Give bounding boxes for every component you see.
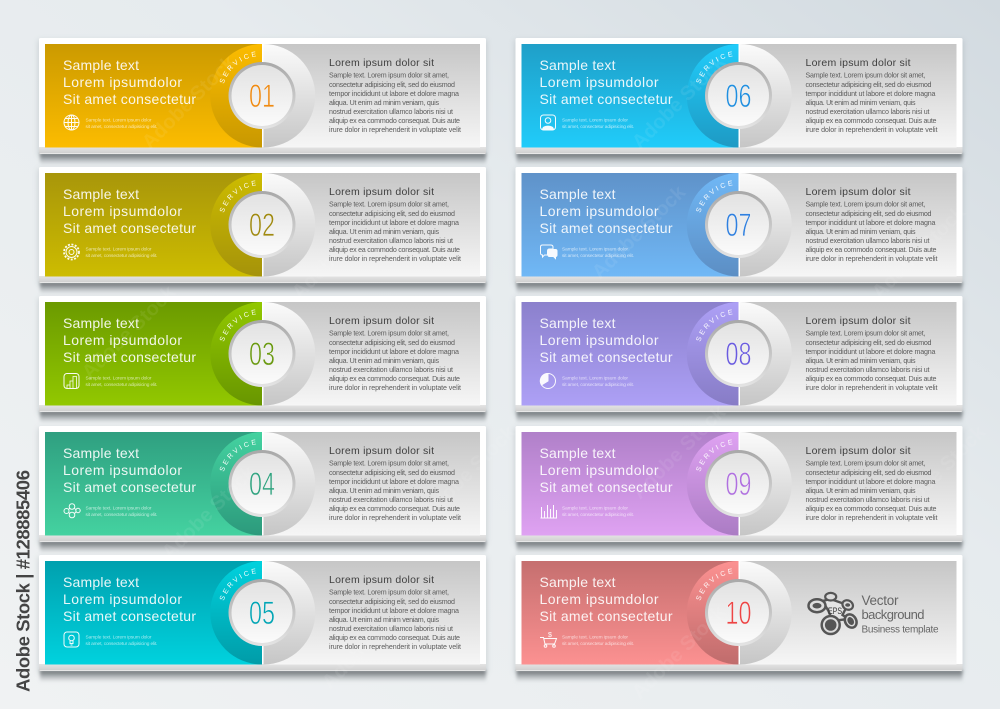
description block: Lorem ipsum dolor sit (806, 445, 911, 457)
description block: Sample text. Lorem ipsum dolor sit amet, (806, 460, 926, 468)
heading lines: Sample text (540, 186, 616, 202)
heading lines: Sample text (540, 574, 616, 590)
service label: SERVICE (220, 52, 256, 84)
card frame (38, 555, 487, 682)
description block: consectetur adipisicing elit, sed do eiusmod (329, 210, 455, 218)
description block (806, 57, 938, 134)
small caption: sit amet, consectetur adipisicing elit. (86, 253, 158, 259)
heading lines (540, 186, 673, 236)
grey panel (264, 432, 480, 536)
grey panel (264, 44, 480, 148)
description block: tempor incididunt ut labore et dolore magna (806, 90, 936, 98)
faint watermark: Adobe Stock (628, 601, 731, 704)
description block: Lorem ipsum dolor sit (329, 186, 434, 198)
description block (806, 186, 938, 263)
faint watermark: Adobe Stock (418, 421, 521, 524)
small caption: sit amet, consectetur adipisicing elit. (86, 382, 158, 388)
small caption: sit amet, consectetur adipisicing elit. (562, 382, 634, 388)
heading lines (540, 57, 673, 107)
heading lines: Lorem ipsumdolor (63, 74, 182, 90)
service label: SERVICE (696, 52, 733, 84)
small caption: sit amet, consectetur adipisicing elit. (562, 641, 634, 647)
description block: consectetur adipisicing elit, sed do eiusmod (806, 81, 932, 89)
description block: Sample text. Lorem ipsum dolor sit amet, (329, 72, 449, 80)
description block: aliquip ex ea commodo consequat. Duis aute (806, 117, 937, 125)
icon: light bulb tile (64, 632, 79, 647)
description block: aliquip ex ea commodo consequat. Duis aute (806, 246, 937, 254)
small caption (562, 118, 634, 130)
service label: SERVICE (696, 180, 732, 212)
icon: shopping cart with dollar (540, 632, 556, 647)
heading lines: Sit amet consectetur (63, 349, 196, 365)
card frame (514, 167, 964, 294)
small caption: Sample text. Lorem ipsum dolor (562, 246, 628, 252)
number ring (687, 302, 792, 406)
description block: Sample text. Lorem ipsum dolor sit amet, (329, 588, 449, 596)
faint watermark: Adobe Stock (888, 421, 991, 524)
card frame (514, 426, 964, 553)
card frame (514, 555, 964, 682)
small caption: Sample text. Lorem ipsum dolor (86, 506, 152, 512)
icon: column chart (540, 505, 557, 518)
card 06 (513, 38, 966, 164)
heading lines: Sit amet consectetur (540, 479, 673, 495)
small caption: Sample text. Lorem ipsum dolor (86, 376, 152, 382)
description block: irure dolor in reprehenderit in voluptate velit (329, 643, 461, 651)
colored panel (522, 44, 738, 148)
description block: Lorem ipsum dolor sit (806, 186, 911, 198)
grey panel (740, 44, 956, 148)
icon: molecule (64, 504, 80, 518)
grey panel (740, 561, 956, 664)
number: 06 (726, 78, 752, 114)
number ring (210, 44, 315, 148)
small caption: Sample text. Lorem ipsum dolor (562, 634, 628, 640)
heading lines: Sit amet consectetur (63, 220, 196, 236)
icon: bar chart tile (64, 374, 79, 388)
service label: SERVICE (696, 568, 732, 600)
EPS logo: EPS (828, 606, 842, 616)
heading lines: Sample text (63, 186, 139, 202)
heading lines: Lorem ipsumdolor (63, 591, 182, 607)
icon: shopping cart with dollar: $ (548, 632, 552, 639)
colored panel (522, 561, 738, 664)
faint watermark: Adobe Stock (318, 591, 421, 694)
heading lines: Lorem ipsumdolor (63, 462, 182, 478)
heading lines: Lorem ipsumdolor (63, 332, 182, 348)
description block (806, 315, 938, 392)
description block (329, 57, 461, 134)
description block: consectetur adipisicing elit, sed do eiusmod (806, 469, 932, 477)
description block: irure dolor in reprehenderit in voluptate velit (806, 126, 938, 134)
small caption: sit amet, consectetur adipisicing elit. (86, 512, 158, 518)
colored panel (45, 44, 262, 148)
card 05 (36, 555, 489, 682)
description block: irure dolor in reprehenderit in voluptate velit (806, 255, 938, 263)
small caption (562, 634, 634, 647)
description block: aliqua. Ut enim ad minim veniam, quis (329, 616, 439, 624)
stock watermark id: Adobe Stock | #128885406 (12, 470, 34, 692)
description block: aliquip ex ea commodo consequat. Duis aute (329, 375, 460, 383)
small caption: sit amet, consectetur adipisicing elit. (562, 253, 634, 259)
card 09 (513, 426, 966, 552)
heading lines (63, 445, 196, 495)
faint watermark: Adobe Stock (588, 181, 691, 284)
description block: tempor incididunt ut labore et dolore magna (329, 607, 459, 615)
faint watermark: Adobe Stock (138, 51, 241, 154)
description block: consectetur adipisicing elit, sed do eiusmod (329, 81, 455, 89)
description block: Lorem ipsum dolor sit (806, 57, 911, 69)
number: 10 (726, 595, 752, 631)
heading lines: Lorem ipsumdolor (540, 203, 659, 219)
service label: SERVICE (220, 310, 256, 342)
faint watermark: Adobe (858, 74, 918, 134)
template caption (862, 593, 939, 636)
description block: Sample text. Lorem ipsum dolor sit amet, (806, 330, 926, 338)
small caption: sit amet, consectetur adipisicing elit. (86, 124, 158, 130)
description block: tempor incididunt ut labore et dolore magna (329, 219, 459, 227)
number ring (210, 173, 315, 276)
heading lines: Lorem ipsumdolor (540, 74, 659, 90)
icon: chat bubbles (540, 245, 557, 258)
description block: Lorem ipsum dolor sit (329, 315, 434, 327)
heading lines: Sample text (63, 57, 139, 73)
description block: Sample text. Lorem ipsum dolor sit amet, (806, 200, 926, 208)
description block: Lorem ipsum dolor sit (806, 315, 911, 327)
small caption (86, 506, 158, 518)
description block: tempor incididunt ut labore et dolore magna (329, 348, 459, 356)
heading lines: Sit amet consectetur (540, 91, 673, 107)
description block: nostrud exercitation ullamco laboris nisi ut (806, 237, 930, 245)
number: 01 (249, 78, 275, 114)
description block: tempor incididunt ut labore et dolore magna (806, 478, 936, 486)
heading lines: Sit amet consectetur (63, 91, 196, 107)
description block: irure dolor in reprehenderit in voluptate velit (329, 384, 461, 392)
card 07 (513, 167, 966, 294)
icon: globe (64, 115, 79, 130)
description block: nostrud exercitation ullamco laboris nisi ut (329, 108, 453, 116)
description block: Sample text. Lorem ipsum dolor sit amet, (329, 330, 449, 338)
number ring (210, 561, 315, 664)
template caption: background (862, 607, 924, 622)
small caption: sit amet, consectetur adipisicing elit. (86, 641, 158, 647)
heading lines: Sample text (63, 574, 139, 590)
small caption (86, 376, 158, 388)
heading lines (63, 315, 196, 365)
heading lines: Sample text (540, 315, 616, 331)
service label: SERVICE (696, 440, 732, 472)
grey panel (264, 561, 480, 664)
description block: consectetur adipisicing elit, sed do eiusmod (806, 339, 932, 347)
number ring (687, 173, 792, 276)
number ring (687, 432, 792, 536)
card 04 (36, 426, 489, 552)
heading lines (540, 315, 673, 365)
description block: irure dolor in reprehenderit in voluptate velit (806, 384, 938, 392)
heading lines: Sample text (63, 445, 139, 461)
heading lines: Lorem ipsumdolor (540, 332, 659, 348)
description block (806, 445, 938, 522)
number ring (210, 432, 315, 536)
card frame (514, 38, 964, 165)
small caption (562, 376, 634, 388)
grey panel (740, 432, 956, 536)
card frame (38, 38, 487, 165)
small caption (86, 246, 158, 259)
icon: pie chart (540, 373, 556, 388)
colored panel (45, 173, 262, 276)
colored panel (522, 173, 738, 276)
heading lines: Sit amet consectetur (540, 608, 673, 624)
card frame (38, 296, 487, 423)
faint watermark: Adobe Stock (628, 51, 731, 154)
icon: gear (64, 244, 79, 260)
description block: irure dolor in reprehenderit in voluptate velit (329, 514, 461, 522)
description block: Sample text. Lorem ipsum dolor sit amet, (329, 460, 449, 468)
description block: tempor incididunt ut labore et dolore magna (806, 219, 936, 227)
description block (329, 315, 461, 392)
faint watermark: Adobe Stock (158, 461, 261, 564)
number: 02 (249, 207, 275, 243)
colored panel (45, 302, 262, 406)
description block: aliqua. Ut enim ad minim veniam, quis (806, 357, 916, 365)
heading lines (540, 574, 673, 624)
grey panel (740, 173, 956, 276)
card frame (38, 426, 487, 553)
card 02 (36, 167, 489, 294)
small caption: Sample text. Lorem ipsum dolor (562, 376, 628, 382)
number: 03 (249, 336, 275, 372)
description block: aliqua. Ut enim ad minim veniam, quis (329, 228, 439, 236)
description block: aliquip ex ea commodo consequat. Duis aute (329, 505, 460, 513)
number: 05 (249, 595, 275, 631)
description block: nostrud exercitation ullamco laboris nisi ut (329, 625, 453, 633)
description block: aliquip ex ea commodo consequat. Duis aute (329, 634, 460, 642)
number: 09 (726, 466, 752, 502)
number: 04 (249, 466, 275, 502)
description block: aliquip ex ea commodo consequat. Duis aute (806, 375, 937, 383)
grey panel (740, 302, 956, 406)
description block: consectetur adipisicing elit, sed do eiusmod (329, 469, 455, 477)
small caption (86, 118, 158, 130)
description block: consectetur adipisicing elit, sed do eiusmod (806, 210, 932, 218)
description block (329, 574, 461, 651)
description block: irure dolor in reprehenderit in voluptate velit (329, 255, 461, 263)
template caption: Vector (862, 593, 899, 608)
description block: irure dolor in reprehenderit in voluptate velit (806, 514, 938, 522)
description block: aliqua. Ut enim ad minim veniam, quis (329, 99, 439, 107)
description block: nostrud exercitation ullamco laboris nisi ut (806, 496, 930, 504)
heading lines (63, 57, 196, 107)
template caption: Business template (862, 625, 939, 636)
heading lines (540, 445, 673, 495)
description block: aliquip ex ea commodo consequat. Duis aute (329, 117, 460, 125)
description block: nostrud exercitation ullamco laboris nisi ut (329, 237, 453, 245)
small caption: Sample text. Lorem ipsum dolor (562, 118, 628, 124)
grey panel (264, 173, 480, 276)
number ring (687, 561, 792, 664)
icon: user tile (540, 115, 556, 130)
card 10 (513, 555, 966, 682)
small caption (562, 246, 634, 259)
colored panel (45, 561, 262, 664)
faint watermark: Adobe Stock (78, 281, 181, 384)
card frame (38, 167, 487, 294)
colored panel (522, 432, 738, 536)
heading lines: Sample text (540, 445, 616, 461)
heading lines: Lorem ipsumdolor (63, 203, 182, 219)
description block: Sample text. Lorem ipsum dolor sit amet, (806, 72, 926, 80)
service label: SERVICE (220, 568, 256, 600)
service label: SERVICE (220, 440, 256, 472)
service label: SERVICE (696, 310, 732, 342)
description block: aliqua. Ut enim ad minim veniam, quis (806, 487, 916, 495)
number ring (687, 44, 792, 148)
description block: Lorem ipsum dolor sit (329, 57, 434, 69)
faint watermark: Adobe (348, 74, 408, 134)
description block: nostrud exercitation ullamco laboris nisi ut (806, 108, 930, 116)
description block: nostrud exercitation ullamco laboris nisi ut (806, 366, 930, 374)
faint watermark: Adobe Stock (868, 201, 971, 304)
description block: aliquip ex ea commodo consequat. Duis aute (329, 246, 460, 254)
small caption: sit amet, consectetur adipisicing elit. (562, 512, 634, 518)
heading lines: Sit amet consectetur (540, 349, 673, 365)
description block (329, 445, 461, 522)
card 01 (36, 38, 489, 164)
description block: aliqua. Ut enim ad minim veniam, quis (806, 228, 916, 236)
description block: aliqua. Ut enim ad minim veniam, quis (329, 487, 439, 495)
description block: tempor incididunt ut labore et dolore magna (806, 348, 936, 356)
heading lines: Sample text (540, 57, 616, 73)
small caption (562, 506, 634, 518)
description block: aliqua. Ut enim ad minim veniam, quis (329, 357, 439, 365)
description block: nostrud exercitation ullamco laboris nisi ut (329, 366, 453, 374)
heading lines: Lorem ipsumdolor (540, 462, 659, 478)
description block: tempor incididunt ut labore et dolore magna (329, 478, 459, 486)
card 03 (36, 296, 489, 422)
card frame (514, 296, 964, 423)
heading lines: Sample text (63, 315, 139, 331)
faint watermark: Adobe Stock (628, 401, 731, 504)
heading lines (63, 574, 196, 624)
description block: Lorem ipsum dolor sit (329, 445, 434, 457)
service label: SERVICE (220, 180, 256, 212)
number: 07 (726, 207, 752, 243)
description block: Sample text. Lorem ipsum dolor sit amet, (329, 200, 449, 208)
card 08 (513, 296, 966, 422)
number: 08 (726, 336, 752, 372)
small caption: sit amet, consectetur adipisicing elit. (562, 124, 634, 130)
faint watermark: Adobe Stock (288, 201, 391, 304)
small caption (86, 634, 158, 647)
heading lines: Sit amet consectetur (63, 479, 196, 495)
description block: Lorem ipsum dolor sit (329, 574, 434, 586)
description block: nostrud exercitation ullamco laboris nisi ut (329, 496, 453, 504)
description block: consectetur adipisicing elit, sed do eiusmod (329, 598, 455, 606)
description block: aliqua. Ut enim ad minim veniam, quis (806, 99, 916, 107)
description block (329, 186, 461, 263)
heading lines (63, 186, 196, 236)
heading lines: Sit amet consectetur (540, 220, 673, 236)
number ring (210, 302, 315, 406)
description block: irure dolor in reprehenderit in voluptate velit (329, 126, 461, 134)
description block: tempor incididunt ut labore et dolore magna (329, 90, 459, 98)
description block: aliquip ex ea commodo consequat. Duis aute (806, 505, 937, 513)
colored panel (45, 432, 262, 536)
EPS logo (808, 593, 859, 634)
small caption: Sample text. Lorem ipsum dolor (86, 246, 152, 252)
small caption: Sample text. Lorem ipsum dolor (86, 634, 152, 640)
colored panel (522, 302, 738, 406)
grey panel (264, 302, 480, 406)
small caption: Sample text. Lorem ipsum dolor (562, 506, 628, 512)
heading lines: Lorem ipsumdolor (540, 591, 659, 607)
small caption: Sample text. Lorem ipsum dolor (86, 118, 152, 124)
heading lines: Sit amet consectetur (63, 608, 196, 624)
description block: consectetur adipisicing elit, sed do eiusmod (329, 339, 455, 347)
